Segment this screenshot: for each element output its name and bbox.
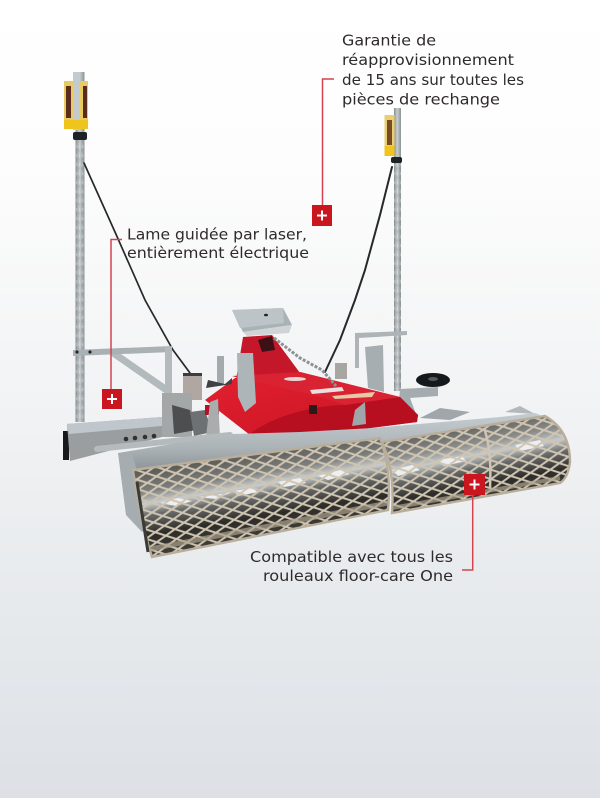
right bracket and wheel <box>335 331 450 414</box>
callout: laser guided screed <box>102 226 309 409</box>
right pole with laser sensor <box>384 108 402 391</box>
left pole with laser sensor <box>64 72 88 422</box>
text block: réapprovisionnement <box>342 51 514 69</box>
right mesh roller <box>382 416 570 513</box>
left bracket arm <box>73 346 202 400</box>
text block <box>250 548 453 585</box>
push tube <box>97 435 230 449</box>
roller end plate <box>118 453 152 532</box>
text block: entièrement électrique <box>127 244 309 262</box>
lifting chain <box>274 338 336 386</box>
machine: laser screed <box>63 72 570 557</box>
text block <box>127 226 309 262</box>
callout: compatible rollers <box>250 474 485 585</box>
left end beam <box>63 393 212 461</box>
text block: Compatible avec tous les <box>250 548 453 566</box>
plus button <box>464 474 485 495</box>
text block: pièces de rechange <box>342 90 500 108</box>
connector line <box>111 240 122 389</box>
connector line <box>462 495 473 570</box>
junction box <box>232 308 292 336</box>
plus button <box>312 205 332 226</box>
text block: Lame guidée par laser, <box>127 226 307 244</box>
roller frame beam <box>118 413 550 473</box>
galvanised mast plate <box>206 353 256 412</box>
plus button <box>102 389 122 409</box>
connector line <box>322 79 334 205</box>
text block: de 15 ans sur toutes les <box>342 71 524 89</box>
text block: rouleaux floor-care One <box>263 567 453 585</box>
text block <box>342 32 524 108</box>
text block: Garantie de <box>342 32 436 50</box>
callout: spare parts guarantee <box>312 32 524 226</box>
left mesh roller <box>133 438 389 557</box>
front hinge <box>200 399 535 446</box>
cables <box>84 163 392 373</box>
red chassis <box>205 335 418 437</box>
